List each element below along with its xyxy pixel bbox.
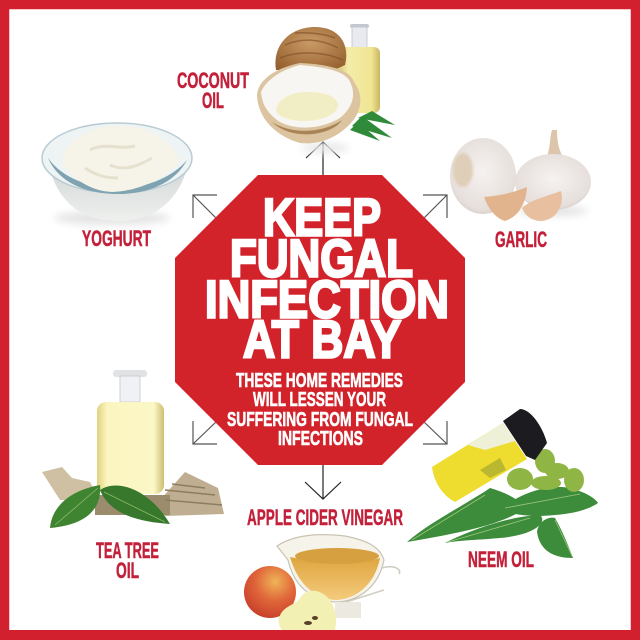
icon: green leaves (50, 485, 170, 528)
arrow: down to apple cider vinegar (305, 465, 341, 499)
title (205, 188, 449, 370)
icon: burlap cloth (42, 467, 224, 516)
title: INFECTION (205, 270, 449, 330)
remedy: neem oil (407, 409, 598, 572)
title: AT BAY (243, 310, 401, 370)
label: coconut oil: OIL (202, 88, 224, 113)
central stop-sign panel (175, 175, 465, 465)
icon: red apple (244, 566, 296, 618)
arrow: to garlic (423, 195, 447, 219)
label: tea tree oil (96, 538, 159, 583)
icon: oil bottle (97, 370, 164, 494)
label: garlic: GARLIC (495, 227, 547, 252)
subtitle: INFECTIONS (278, 428, 363, 450)
arrow: up to coconut oil (306, 142, 340, 175)
subtitle: WILL LESSEN YOUR (253, 389, 386, 411)
label: apple cider vinegar: APPLE CIDER VINEGAR (247, 505, 403, 530)
label: coconut oil: COCONUT (177, 68, 249, 93)
remedy: apple cider vinegar (244, 505, 403, 630)
icon: oil vial (432, 409, 547, 502)
title: KEEP (263, 188, 381, 248)
subtitle: SUFFERING FROM FUNGAL (227, 409, 413, 431)
arrows (193, 142, 447, 499)
subtitle (227, 370, 413, 450)
icon: apple half (279, 591, 336, 630)
label: coconut oil (177, 68, 249, 113)
label: tea tree oil: TEA TREE (96, 538, 159, 563)
icon: neem fruits (507, 449, 584, 492)
icon: leaves (350, 111, 395, 141)
remedy: tea tree oil (42, 370, 224, 583)
icon: halved coconut (257, 63, 360, 153)
label: yoghurt: YOGHURT (82, 226, 151, 251)
remedy: garlic (450, 130, 591, 252)
arrow: to tea tree oil (193, 421, 217, 444)
label: tea tree oil: OIL (116, 558, 139, 583)
title: FUNGAL (230, 230, 413, 288)
icon: bowl of yoghurt (42, 123, 192, 225)
icon: oil bottle (338, 24, 380, 113)
subtitle: THESE HOME REMEDIES (236, 370, 403, 392)
icon: whole coconut (275, 27, 346, 72)
bottom frame edge over photos (0, 630, 640, 640)
arrow: to neem oil (423, 421, 447, 444)
arrow: to yoghurt (193, 195, 217, 219)
remedy: coconut oil (177, 24, 395, 153)
icon: neem leaves (407, 487, 598, 558)
icon: garlic bulbs and cloves (450, 130, 591, 221)
label: neem oil: NEEM OIL (468, 547, 534, 572)
remedy: yoghurt (42, 123, 192, 251)
icon: glass gravy boat (277, 535, 400, 618)
